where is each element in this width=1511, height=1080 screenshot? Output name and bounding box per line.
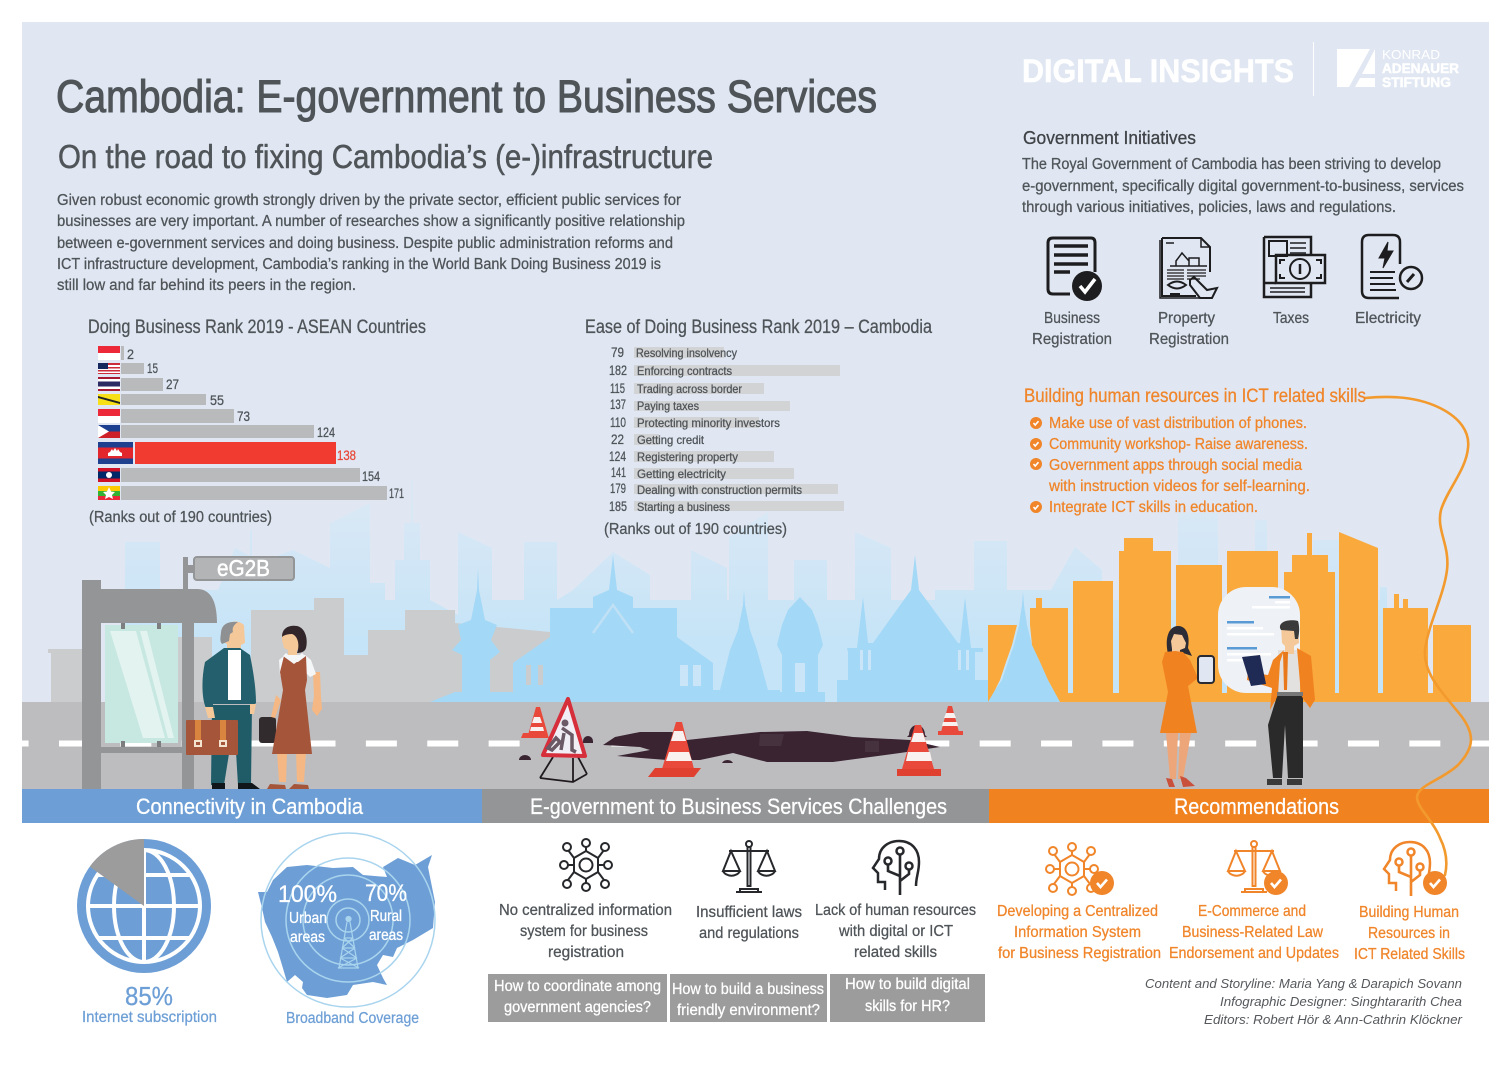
credits: Editors: Robert Hör & Ann-Cathrin Klöckner — [1204, 1012, 1463, 1027]
section band: challenges: E-government to Business Services Challenges — [530, 794, 947, 819]
section band: challenges — [482, 789, 989, 823]
map of Cambodia — [258, 855, 435, 998]
icon: taxes — [1264, 237, 1325, 297]
recommendation: information system: Developing a Centralized — [997, 903, 1158, 920]
coverage labels: Rural — [370, 908, 402, 925]
initiative labels: Registration — [1149, 331, 1229, 348]
bar values: 73 — [237, 408, 250, 424]
government initiatives text: e-government, specifically digital government-to-business, services — [1022, 178, 1464, 195]
footnote: (Ranks out of 190 countries) — [89, 509, 272, 526]
challenge: laws: and regulations — [699, 925, 799, 942]
indicator labels: Getting electricity — [637, 467, 726, 481]
rank numbers: 141 — [611, 464, 626, 480]
human resources list: with instruction videos for self-learning. — [1048, 478, 1310, 495]
temple silhouettes — [430, 555, 1060, 702]
question box — [830, 974, 985, 1022]
rank numbers: 110 — [610, 414, 626, 430]
human resources list: Community workshop- Raise awareness. — [1049, 436, 1308, 453]
traffic cones — [521, 706, 963, 777]
recommendation: information system: Information System — [1014, 924, 1141, 941]
question box: government agencies? — [504, 999, 651, 1016]
indicator labels: Resolving insolvency — [636, 346, 737, 360]
credits — [1145, 976, 1463, 1027]
footnote: (Ranks out of 190 countries) — [604, 521, 787, 538]
government initiatives text: Government Initiatives — [1023, 127, 1196, 148]
intro paragraph — [57, 192, 685, 294]
initiative labels: Registration — [1032, 331, 1112, 348]
indicator labels: Starting a business — [637, 500, 730, 514]
challenge: human resources: related skills — [854, 944, 937, 961]
human resources list: Government apps through social media — [1049, 457, 1302, 474]
icon: scales — [723, 841, 775, 892]
indicator labels: Trading across border — [637, 382, 742, 396]
road — [22, 702, 1489, 790]
indicator bars — [634, 347, 844, 511]
recommendation: information system — [997, 843, 1161, 962]
icon: business registration — [1048, 238, 1102, 301]
branding: digital insights: ADENAUER — [1382, 60, 1459, 76]
indicator labels: Protecting minority investors — [637, 416, 780, 430]
bar values: 27 — [166, 376, 179, 392]
rank numbers: 185 — [609, 498, 627, 514]
indicator labels: Enforcing contracts — [637, 364, 732, 378]
question box — [670, 974, 827, 1022]
bus shelter: eG2B — [217, 555, 270, 581]
question box: friendly environment? — [677, 1002, 820, 1019]
recommendation: law endorsement: Endorsement and Updates — [1169, 945, 1339, 962]
challenge: centralized information — [488, 839, 672, 1022]
rank numbers — [609, 344, 627, 514]
section band: connectivity — [22, 789, 482, 823]
rank numbers: 182 — [609, 362, 627, 378]
human resources list: Building human resources in ICT related skills — [1024, 386, 1366, 407]
coverage labels: areas — [290, 929, 325, 946]
question box: How to build a business — [672, 981, 824, 998]
branding: digital insights: STIFTUNG — [1382, 74, 1451, 90]
branding: digital insights: KONRAD — [1382, 47, 1440, 62]
connector curve — [1365, 397, 1471, 875]
internet subscription stat: 85% — [125, 981, 173, 1011]
broadband coverage stat — [258, 833, 435, 1027]
man with briefcase — [186, 622, 260, 789]
question box: skills for HR? — [865, 998, 950, 1015]
icon: signal tower — [338, 916, 359, 968]
coverage labels: areas — [369, 927, 403, 944]
intro paragraph: Given robust economic growth strongly driven by the private sector, efficient public services for — [57, 192, 681, 209]
bar values: 15 — [147, 360, 158, 376]
bar values: 55 — [210, 392, 224, 408]
section band: recommendations — [989, 789, 1489, 823]
branding: digital insights — [1022, 42, 1459, 96]
recommendation: law endorsement: E-Commerce and — [1198, 903, 1306, 920]
recommendation: human resources: ICT Related Skills — [1354, 946, 1465, 963]
chart: ASEAN doing business rank — [88, 317, 426, 526]
intro paragraph: still low and far behind its peers in the region. — [57, 277, 356, 294]
initiative labels: Property — [1158, 310, 1215, 327]
chart heading: Doing Business Rank 2019 - ASEAN Countries — [88, 317, 426, 338]
intro paragraph: between e-government services and doing business. Despite public administration reforms and — [57, 235, 673, 252]
icon: scales with check — [1228, 841, 1288, 895]
recommendation: law endorsement: Business-Related Law — [1182, 924, 1323, 941]
chart heading: Ease of Doing Business Rank 2019 – Cambodia — [585, 317, 932, 338]
businessman with tablet — [1242, 620, 1315, 785]
bar values: 154 — [362, 468, 380, 484]
indicator labels: Dealing with construction permits — [637, 483, 802, 497]
title: Cambodia: E-government to Business Services — [56, 71, 877, 122]
bars — [121, 346, 387, 500]
panel: pale blue background — [22, 22, 1489, 792]
indicator labels — [636, 346, 802, 514]
rank numbers: 115 — [610, 380, 625, 396]
businesswoman with tablet — [1160, 626, 1214, 787]
credits: Infographic Designer: Singhtararith Chea — [1220, 994, 1462, 1009]
government initiatives text: through various initiatives, policies, laws and regulations. — [1022, 199, 1396, 216]
icon: network — [560, 839, 612, 891]
bar values: 124 — [317, 424, 335, 440]
question box — [488, 974, 667, 1022]
intro paragraph: businesses are very important. A number of researches show a significantly positive relationship — [57, 213, 685, 230]
human resources list — [1024, 386, 1366, 516]
rank numbers: 124 — [609, 448, 626, 464]
credits: Content and Storyline: Maria Yang & Darapich Sovann — [1145, 976, 1462, 991]
rank numbers: 79 — [611, 344, 624, 360]
bar values: 138 — [337, 447, 356, 463]
internet subscription stat: Internet subscription — [82, 1009, 217, 1026]
chart: Cambodia ease of doing business — [585, 317, 932, 538]
initiative labels — [1032, 310, 1421, 348]
challenge: laws: Insufficient laws — [696, 904, 802, 921]
woman with handbag — [259, 626, 322, 789]
recommendation: law endorsement — [1169, 841, 1339, 962]
road dashes — [0, 740, 1495, 746]
challenge: centralized information: system for business — [520, 923, 648, 940]
intro paragraph: ICT infrastructure development, Cambodia’s ranking in the World Bank Doing Business 2019 is — [57, 256, 661, 273]
icon: property registration — [1160, 238, 1217, 298]
bar values — [127, 346, 404, 501]
rank numbers: 179 — [610, 480, 626, 496]
recommendation: human resources: Resources in — [1368, 925, 1450, 942]
coverage labels: Urban — [289, 910, 327, 927]
government initiatives text: The Royal Government of Cambodia has been striving to develop — [1022, 156, 1441, 173]
broadband coverage stat: Broadband Coverage — [286, 1010, 419, 1027]
indicator labels: Getting credit — [637, 433, 705, 447]
icon: AI head — [873, 841, 919, 895]
signal rings — [261, 833, 435, 1007]
recommendation: human resources — [1354, 842, 1465, 963]
challenge: human resources: with digital or ICT — [838, 923, 953, 940]
initiative labels: Electricity — [1355, 310, 1421, 327]
initiative labels: Business — [1044, 310, 1100, 327]
recommendation: information system: for Business Registration — [998, 945, 1161, 962]
indicator labels: Registering property — [637, 450, 738, 464]
icon: network with check — [1046, 843, 1114, 895]
government initiatives text — [1022, 127, 1464, 216]
bus shelter — [82, 555, 294, 790]
icon: head with check — [1384, 842, 1447, 896]
initiative labels: Taxes — [1273, 310, 1309, 327]
internet subscription stat — [77, 839, 217, 1026]
challenge: centralized information: registration — [548, 944, 624, 961]
human resources list: Integrate ICT skills in education. — [1049, 499, 1258, 516]
road hole — [519, 725, 940, 763]
warning sign — [540, 699, 587, 782]
briefcase — [186, 720, 238, 755]
question box: How to build digital — [845, 976, 970, 993]
temple windows — [526, 665, 543, 685]
icon: electricity — [1362, 235, 1422, 298]
recommendation: human resources: Building Human — [1359, 904, 1459, 921]
challenge: human resources — [815, 841, 985, 1022]
bar values: 2 — [127, 346, 134, 362]
section band: connectivity: Connectivity in Cambodia — [136, 794, 364, 819]
branding: digital insights: DIGITAL INSIGHTS — [1022, 53, 1294, 89]
icon: globe — [77, 839, 211, 973]
illustration: street scene — [22, 514, 1489, 823]
coverage labels: 70% — [365, 880, 407, 907]
subtitle: On the road to fixing Cambodia’s (e-)infrastructure — [58, 138, 713, 175]
pale blue skyline — [125, 514, 1387, 702]
human resources list: Make use of vast distribution of phones. — [1049, 415, 1307, 432]
challenge: laws — [670, 841, 827, 1022]
bar values: 171 — [389, 485, 404, 501]
challenge: human resources: Lack of human resources — [815, 902, 976, 919]
challenge: centralized information: No centralized information — [499, 902, 672, 919]
data bubble behind man — [1218, 587, 1300, 693]
section band: recommendations: Recommendations — [1174, 794, 1339, 819]
indicator labels: Paying taxes — [637, 399, 699, 413]
coverage labels — [278, 880, 407, 946]
flags — [98, 346, 133, 500]
rank numbers: 22 — [611, 431, 624, 447]
grey buildings — [48, 598, 550, 702]
coverage labels: 100% — [278, 881, 337, 908]
orange buildings — [988, 532, 1471, 702]
rank numbers: 137 — [610, 396, 626, 412]
list bullets — [1030, 417, 1042, 513]
question box: How to coordinate among — [494, 978, 661, 995]
